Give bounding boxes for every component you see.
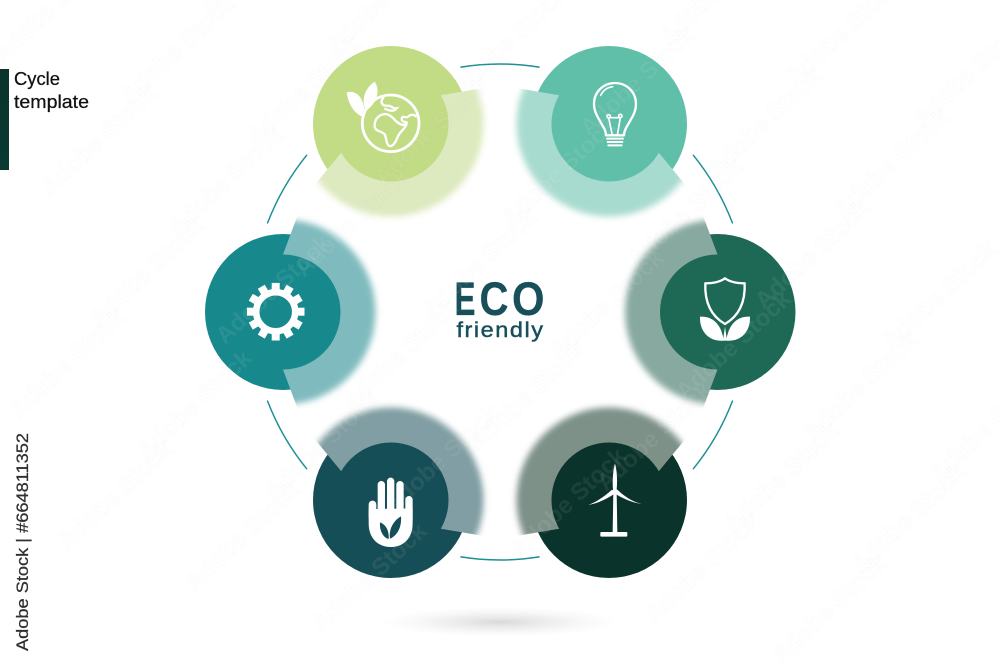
faint diagonal watermark: Adobe Stock	[846, 458, 972, 578]
icon: lightbulb	[594, 83, 636, 145]
ground shadow	[382, 607, 618, 637]
faint diagonal watermark: Adobe Stock	[877, 235, 1000, 355]
node: dark green wind turbine	[512, 403, 687, 578]
faint diagonal watermark: Adobe Stock	[180, 476, 306, 596]
icon: wind turbine	[588, 463, 642, 537]
faint diagonal watermark: Adobe Stock	[640, 508, 766, 628]
node: green globe	[313, 46, 487, 220]
faint diagonal watermark: Adobe Stock	[163, 121, 289, 241]
faint diagonal watermark: Adobe Stock	[242, 30, 368, 150]
faint diagonal watermark: Adobe Stock	[750, 194, 876, 314]
faint diagonal watermark: Adobe Stock	[719, 417, 845, 537]
faint diagonal watermark: Adobe Stock	[496, 112, 622, 232]
icon: globe with leaves	[347, 82, 419, 152]
faint diagonal watermark: Adobe Stock	[465, 335, 591, 455]
faint diagonal watermark: Adobe Stock	[211, 229, 337, 349]
faint diagonal watermark: Adobe Stock	[379, 399, 505, 519]
faint diagonal watermark: Adobe Stock	[417, 203, 543, 323]
faint diagonal watermark: Adobe Stock	[259, 385, 385, 505]
icon: gear	[247, 283, 304, 340]
title: Cycle template: Cycle	[14, 69, 60, 89]
faint diagonal watermark: Adobe Stock	[53, 435, 179, 555]
faint diagonal watermark: Adobe Stock	[671, 285, 797, 405]
faint diagonal watermark: Adobe Stock	[338, 294, 464, 414]
title bar accent	[0, 69, 9, 170]
faint diagonal watermark: Adobe Stock	[506, 442, 632, 562]
faint diagonal watermark: Adobe Stock	[290, 162, 416, 282]
faint diagonal watermark: Adobe Stock	[5, 303, 131, 423]
faint diagonal watermark: Adobe Stock	[798, 326, 924, 446]
faint diagonal watermark: Adobe Stock	[36, 80, 162, 200]
faint diagonal watermark: Adobe Stock	[592, 376, 718, 496]
faint diagonal watermark: Adobe Stock	[829, 103, 955, 223]
faint diagonal watermark: Adobe Stock	[84, 212, 210, 332]
title: Cycle template: template	[14, 92, 89, 112]
side stock label: Adobe Stock | #664811352	[13, 433, 32, 651]
connector arcs	[268, 64, 732, 560]
node: forest green shield	[625, 220, 810, 404]
center heading: ECO friendly: E	[454, 273, 476, 326]
node: teal gear	[190, 220, 376, 404]
icon: shield with leaves	[700, 278, 750, 341]
faint diagonal watermark: Adobe Stock	[307, 517, 433, 637]
icon: hand with leaf	[369, 478, 413, 547]
faint diagonal watermark: Adobe Stock	[767, 549, 893, 667]
node: deep teal hand	[313, 403, 488, 578]
faint diagonal watermark: Adobe Stock	[544, 244, 670, 364]
faint diagonal watermark: Adobe Stock	[369, 71, 495, 191]
faint diagonal watermark: Adobe Stock	[132, 344, 258, 464]
node: mint lightbulb	[512, 46, 687, 220]
faint diagonal watermark: Adobe Stock	[575, 21, 701, 141]
center heading: ECO friendly	[454, 273, 544, 342]
center heading: ECO friendly: C	[480, 273, 508, 326]
faint diagonal watermark: Adobe Stock	[702, 62, 828, 182]
faint diagonal watermark: Adobe Stock	[623, 153, 749, 273]
title: Cycle template	[14, 69, 89, 112]
center heading: ECO friendly: friendly	[456, 318, 544, 342]
center heading: ECO friendly: O	[512, 273, 544, 326]
